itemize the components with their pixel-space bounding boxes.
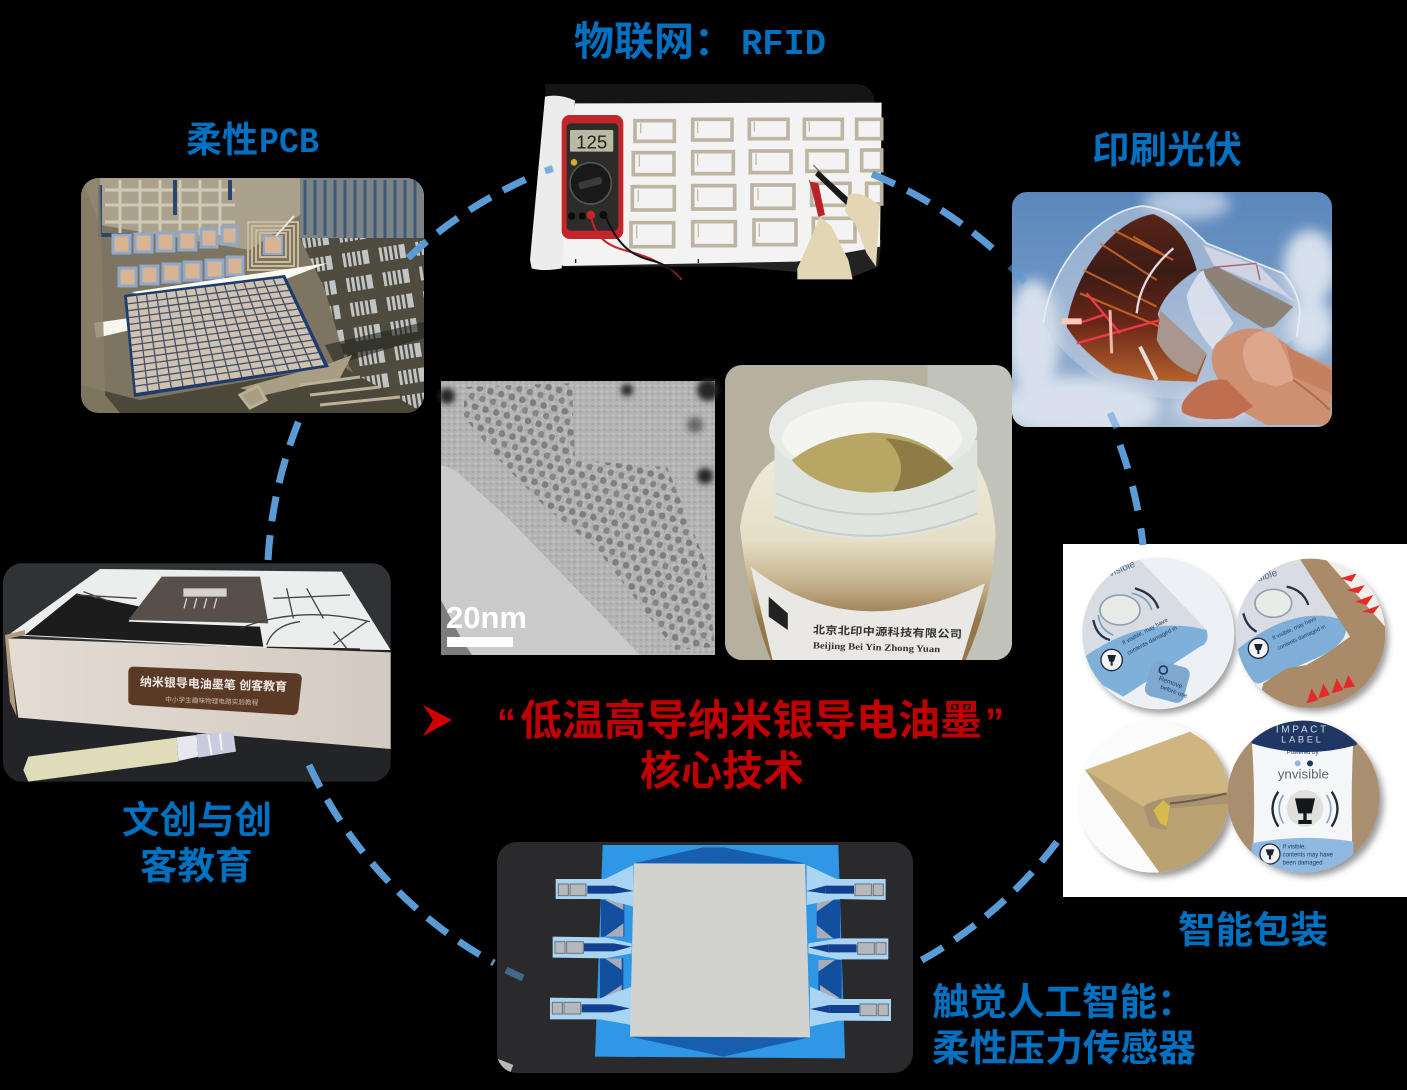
- circle: impact label: contents may have: [1283, 853, 1334, 859]
- heading: creative education: 客教育: [140, 845, 252, 887]
- core technology title: ”: [985, 702, 1004, 744]
- photo: jar of silver ink: 北京北印中源科技有限公司: [813, 623, 962, 641]
- heading: tactile AI pressure sensor: 触觉人工智能：: [932, 981, 1194, 1023]
- photo: jar of silver ink: [721, 363, 1016, 663]
- scale label: 20nm: [446, 600, 527, 635]
- photo: printed photovoltaic film: [1012, 192, 1332, 427]
- circle: impact label: IMPACT: [1276, 725, 1329, 736]
- icon: red arrowhead bullet: [423, 705, 452, 736]
- sensing surface: [630, 863, 810, 1037]
- photo: smart packaging impact labels: [1063, 544, 1407, 897]
- blue film: [595, 845, 845, 1058]
- far film section: [1200, 267, 1293, 328]
- core technology title: 低温高导纳米银导电油墨: [520, 697, 982, 744]
- photo: pen and creative education box: 纳米银导电油墨笔 创客教育: [140, 674, 287, 694]
- heading: flexible PCB: PCB: [259, 123, 319, 163]
- gloved hands and probes: [809, 165, 857, 217]
- circle: label on cardboard with arrows: contents damaged in: [1277, 624, 1327, 652]
- circle: impact label: Powered by: [1287, 750, 1318, 756]
- circle: label with removable tab: If visible, may have: [1121, 617, 1170, 647]
- circle: label on cardboard with arrows: sible: [1256, 568, 1279, 585]
- brown label: [128, 667, 302, 715]
- ink pen: [23, 738, 178, 782]
- nanoparticles: [464, 383, 714, 650]
- multimeter: 125: [576, 131, 607, 152]
- lower dark area: [81, 365, 424, 413]
- heading: RFID: [574, 20, 826, 65]
- heading: printed photovoltaics: 印刷光伏: [1092, 129, 1242, 171]
- bottle body: [740, 460, 996, 660]
- box front panel: [7, 638, 391, 749]
- multimeter: [562, 115, 623, 239]
- circle: impact label: LABEL: [1281, 735, 1324, 745]
- corner glare: [498, 1058, 514, 1072]
- transparent substrate: [1043, 206, 1300, 399]
- circle: damaged parcel: [1077, 720, 1230, 873]
- product label: [751, 567, 985, 660]
- ink surface: [792, 433, 954, 493]
- upper gold trace area: [81, 178, 424, 250]
- circle: impact label: [1227, 720, 1380, 873]
- heading: flexible PCB: [186, 119, 319, 163]
- photo: TEM micrograph of silver nanoparticles: [439, 379, 719, 655]
- comb pad array: [300, 238, 424, 413]
- circle shadows: [1083, 563, 1388, 877]
- core technology title: 核心技术: [640, 748, 804, 794]
- core technology title: “: [497, 702, 516, 744]
- circle: label with removable tab: contents damaged in: [1126, 625, 1178, 657]
- heading: tactile AI pressure sensor: [932, 981, 1196, 1069]
- paper roll: [530, 96, 575, 270]
- test pads: [113, 227, 243, 286]
- circle: impact label: ynvisible: [1278, 766, 1329, 781]
- paper sheet: [553, 103, 882, 266]
- heading: creative education: 文创与创: [122, 799, 272, 841]
- photo: flexible pressure sensor: [497, 840, 915, 1075]
- dashed circular connector: [268, 168, 1143, 978]
- photo: flexible PCB: [81, 178, 424, 413]
- solar cell: [1067, 214, 1207, 382]
- heading: flexible PCB: 柔性: [186, 119, 258, 160]
- heading: creative education: [122, 799, 272, 887]
- circle: label with removable tab: before use: [1159, 685, 1189, 700]
- bottle rim: [769, 380, 978, 446]
- photo: pen and creative education box: [3, 563, 391, 782]
- heading: tactile AI pressure sensor: 柔性压力传感器: [932, 1027, 1196, 1069]
- carbon film edge: [441, 465, 640, 655]
- antenna frames: [631, 119, 882, 247]
- sensor tabs: [550, 865, 891, 1027]
- probe cables: [591, 215, 682, 279]
- spiral coil: [248, 222, 298, 270]
- photo: jar of silver ink: Beijing Bei Yin Zhong Yuan: [813, 641, 941, 655]
- fingers: [1212, 328, 1332, 425]
- circle: impact label: been damaged: [1283, 861, 1323, 867]
- circle: label with removable tab: [1080, 557, 1237, 710]
- white glare: [132, 263, 328, 294]
- heading: RFID: 物联网：: [574, 20, 734, 64]
- neck ribs: [774, 440, 977, 539]
- clouds: [1012, 192, 1332, 427]
- circle: impact label: If visible,: [1283, 845, 1306, 851]
- core technology title: [497, 697, 1004, 794]
- dark backing: [545, 84, 875, 103]
- circle: label on cardboard with arrows: If visible, may have: [1272, 616, 1318, 642]
- dark contamination spots: [439, 379, 719, 484]
- circle: label on cardboard with arrows: [1233, 557, 1390, 710]
- heading: smart packaging: 智能包装: [1178, 909, 1328, 951]
- sketch lines: [77, 588, 370, 648]
- dark blue side windows: [600, 900, 842, 998]
- scale bar: [447, 637, 513, 647]
- circle: label with removable tab: visible: [1107, 559, 1137, 579]
- heading: RFID: RFID: [741, 24, 826, 65]
- photo: pen and creative education box: 中小学生趣味物理电路实验教程: [165, 695, 259, 707]
- circle: label with removable tab: Remove: [1158, 675, 1184, 690]
- photo: RFID antenna roll with multimeter: [530, 84, 882, 279]
- box top: [8, 569, 391, 650]
- sensor grid: [124, 275, 329, 397]
